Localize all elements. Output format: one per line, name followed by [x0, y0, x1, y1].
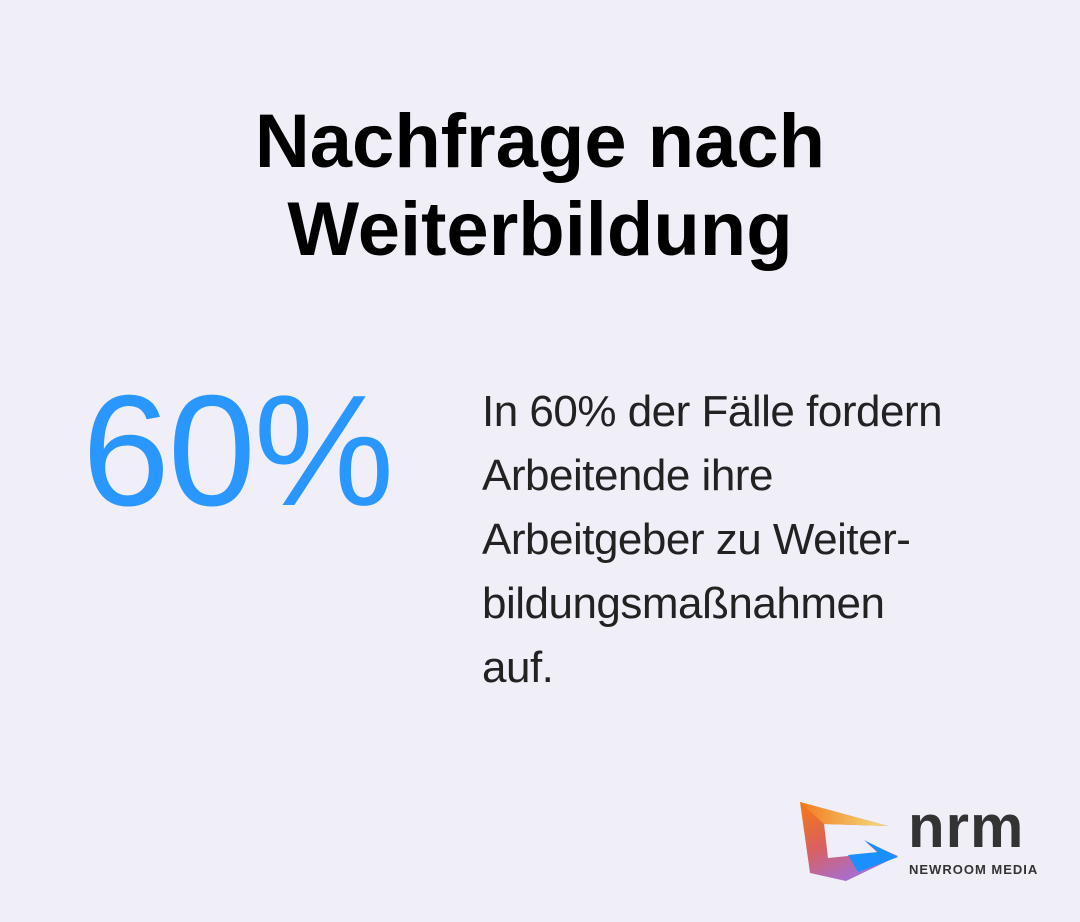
logo: NEWROOM MEDIA — [909, 862, 1038, 877]
title: Nachfrage nach — [255, 99, 825, 184]
description text: Arbeitende ihre — [482, 451, 773, 500]
description text: bildungsmaßnahmen — [482, 579, 884, 628]
logo — [800, 793, 1038, 881]
icon: logo mark — [800, 802, 898, 881]
big number: 60% — [82, 363, 392, 539]
logo text: nrm — [908, 793, 1024, 860]
description text — [482, 387, 942, 692]
title: Weiterbildung — [287, 187, 793, 272]
title — [255, 99, 825, 272]
description text: Arbeitgeber zu Weiter- — [482, 515, 910, 564]
description text: auf. — [482, 643, 553, 692]
description text: In 60% der Fälle fordern — [482, 387, 942, 436]
